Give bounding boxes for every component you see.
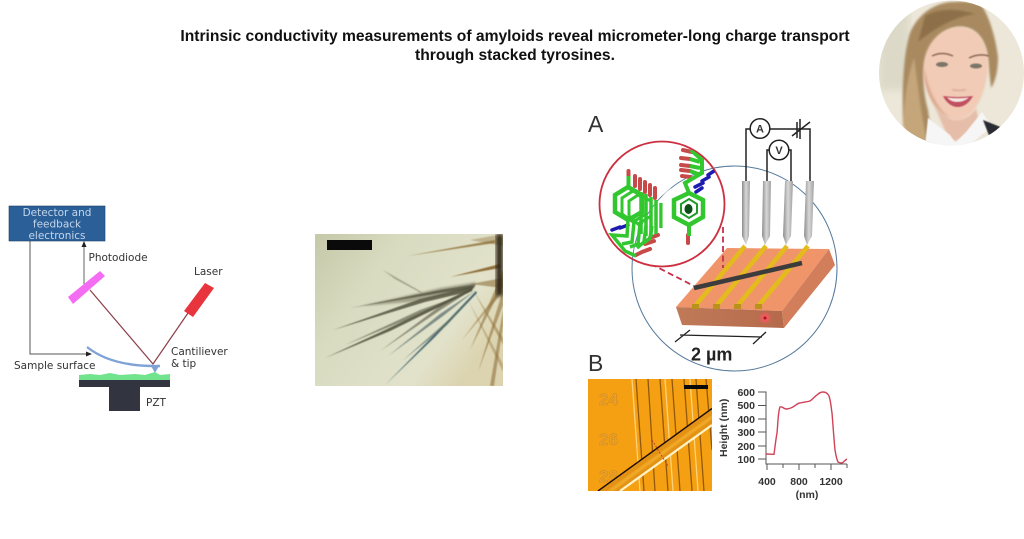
red marker (760, 313, 770, 323)
x axis title: (nm) (796, 489, 818, 501)
label: cantilever and tip: Cantiliever (171, 346, 228, 358)
x tick labels: 1200 (819, 476, 843, 488)
blue zoom circle (632, 166, 837, 371)
neck (935, 108, 978, 142)
tip (151, 366, 159, 373)
voltmeter: V (775, 145, 783, 157)
numbers embossed: 24 (599, 390, 618, 409)
portrait photo (879, 0, 1024, 146)
panel: AFM schematic (9, 206, 228, 411)
axes (758, 392, 847, 470)
tyrosine stacks (612, 150, 714, 256)
face (924, 27, 988, 120)
numbers embossed: 26 (599, 430, 618, 449)
stage (79, 380, 170, 387)
detector box: electronics (28, 230, 86, 242)
height curve (766, 392, 847, 463)
x tick labels (758, 476, 843, 488)
blue nitrogen right (695, 171, 714, 192)
nose and mouth (952, 89, 966, 91)
gold electrodes (696, 246, 808, 305)
panel label: B: B (588, 350, 603, 376)
blue nitrogen left (612, 225, 628, 230)
shirt (925, 112, 992, 146)
arrowhead: feedback (86, 352, 92, 356)
label: laser: Laser (194, 266, 223, 278)
fibre on AFM (598, 409, 712, 491)
left stack backbones (641, 192, 661, 237)
sample layer (79, 372, 170, 380)
red section line (652, 440, 668, 466)
height profile chart (718, 387, 847, 501)
label: PZT: PZT (146, 397, 167, 409)
arrowhead: photodiode (82, 241, 86, 247)
panel label: A: A (588, 111, 604, 137)
detector box: feedback (33, 218, 82, 230)
red oxygen ends right (681, 150, 692, 243)
amyloid needles (325, 270, 477, 385)
scale bar (327, 240, 372, 250)
feedback arrow to sample surface (30, 241, 88, 354)
label: photodiode: Photodiode (88, 252, 148, 264)
x tick labels: 800 (790, 476, 808, 488)
micrograph of amyloid crystals (315, 234, 503, 386)
label: cantilever and tip: & tip (171, 358, 197, 370)
y tick labels: 100 (737, 454, 755, 466)
eyes and brows (932, 54, 989, 68)
electrode ends (692, 304, 762, 309)
title: Intrinsic conductivity measurements of amyloids reveal micrometer-long charge transport (180, 28, 850, 45)
arc of blue circle inside magnifier (632, 168, 713, 259)
label: sample surface: Sample surface (14, 360, 96, 372)
detector box: Detector and (23, 207, 91, 219)
y tick labels: 400 (737, 414, 755, 426)
label: 2 micrometres: 2 µm (691, 344, 732, 364)
voltmeter (769, 140, 789, 160)
laser (184, 283, 214, 317)
scale arrow (675, 330, 766, 344)
right stacked rings (674, 150, 703, 236)
photodiode arrow (83, 244, 85, 284)
x tick labels: 400 (758, 476, 776, 488)
title: through stacked tyrosines. (415, 47, 615, 64)
hair (903, 2, 998, 146)
title (180, 28, 850, 64)
panel A: four-probe device (600, 119, 837, 371)
ammeter: A (756, 124, 764, 136)
photodiode (68, 271, 105, 304)
brown crystal bundle (407, 234, 503, 386)
detector box (9, 206, 105, 242)
white fade between stacks (663, 180, 670, 230)
AFM height image (588, 379, 712, 491)
PZT block (109, 387, 140, 411)
y tick labels: 300 (737, 427, 755, 439)
variable voltage source (792, 119, 810, 139)
y tick labels (737, 387, 755, 466)
y tick labels: 500 (737, 400, 755, 412)
nanowire (694, 263, 802, 288)
aromatic ring core (684, 204, 692, 214)
y axis title: Height (nm) (718, 399, 730, 457)
red magnifier circle (600, 142, 724, 266)
laser beams (90, 290, 188, 364)
substrate block (676, 248, 835, 328)
jacket (982, 120, 1000, 136)
y tick labels: 200 (737, 441, 755, 453)
circuit wires (746, 129, 810, 182)
left stacked rings (612, 176, 652, 256)
electrode lines (632, 379, 712, 491)
red oxygen ends left (628, 171, 658, 255)
numbers embossed (599, 390, 618, 486)
probes (742, 181, 814, 245)
cantilever (87, 347, 160, 366)
y tick labels: 600 (737, 387, 755, 399)
numbers embossed: 28 (599, 467, 618, 486)
ammeter (750, 119, 770, 138)
dashed leader lines (651, 227, 723, 286)
scale bar (684, 385, 708, 389)
